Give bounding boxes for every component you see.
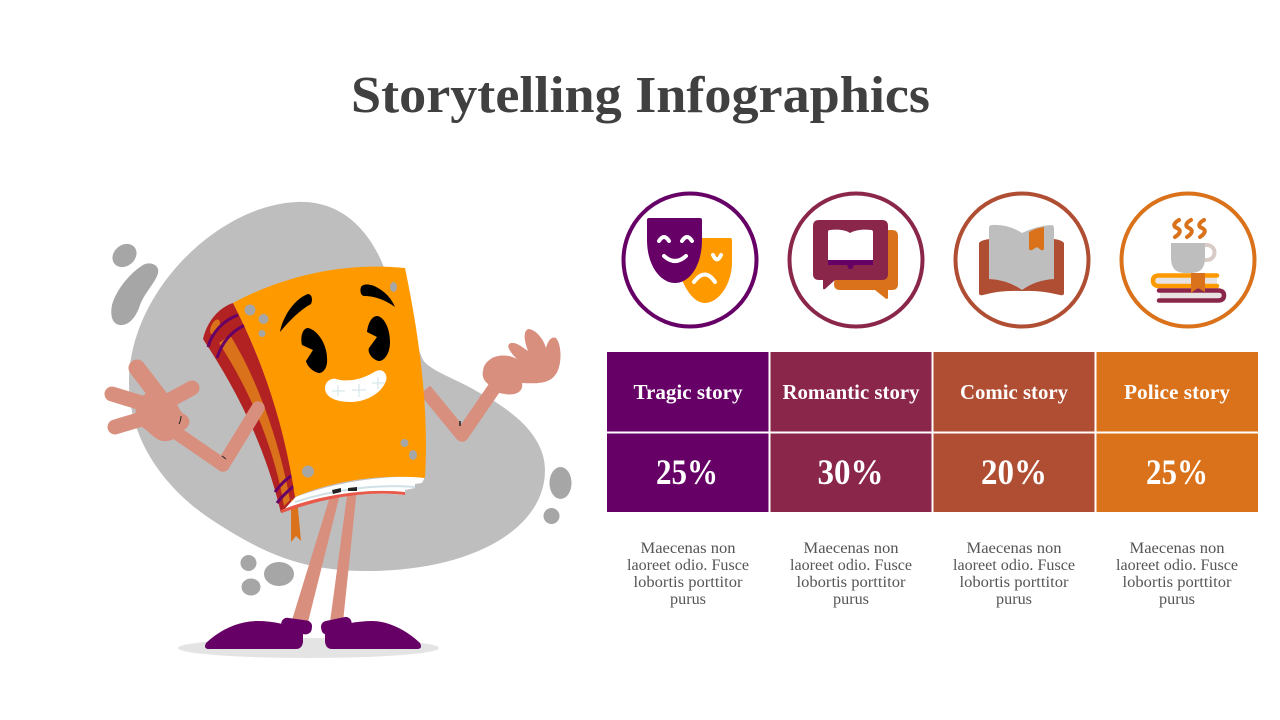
icon: coffee cup on books [1122, 194, 1254, 326]
column: Comic story [934, 352, 1094, 608]
column: Tragic story: Tragic story [634, 380, 743, 404]
column: Comic story: purus [996, 591, 1032, 608]
bookmark ribbon [291, 498, 301, 542]
left arm and hand [112, 368, 258, 465]
column: Police story: Police story [1124, 380, 1231, 404]
grey background blob [129, 202, 545, 571]
column: Tragic story [607, 352, 768, 608]
column: Romantic story: purus [833, 591, 869, 608]
book spine [203, 303, 297, 513]
column: Police story: lobortis porttitor [1122, 574, 1232, 591]
book cover [233, 267, 426, 497]
cover spots [244, 282, 417, 478]
column: Romantic story: 30% [818, 452, 884, 492]
column: Police story: purus [1159, 591, 1195, 608]
book pages [281, 477, 425, 513]
shoes [205, 616, 421, 649]
column: Tragic story: 25% [656, 452, 718, 492]
column: Romantic story: lobortis porttitor [796, 574, 906, 591]
column: Comic story: laoreet odio. Fusce [953, 557, 1075, 574]
illustration: book character [108, 202, 572, 658]
column: Tragic story: Maecenas non [640, 540, 736, 557]
column: Comic story: 20% [981, 452, 1047, 492]
face [280, 284, 395, 402]
column: Tragic story: laoreet odio. Fusce [627, 557, 749, 574]
ground shadow [178, 638, 439, 658]
column: Romantic story: Romantic story [782, 380, 920, 404]
column: Romantic story: Maecenas non [804, 540, 899, 557]
icon: speech bubbles with book [790, 194, 922, 326]
column: Comic story: Comic story [960, 380, 1068, 404]
column: Comic story: lobortis porttitor [960, 574, 1069, 591]
column: Police story [1096, 352, 1258, 608]
column: Police story: Maecenas non [1130, 540, 1225, 557]
column: Romantic story: laoreet odio. Fusce [790, 557, 912, 574]
column: Tragic story: lobortis porttitor [634, 574, 743, 591]
column: Tragic story: purus [670, 591, 706, 608]
column: Police story: laoreet odio. Fusce [1116, 557, 1238, 574]
icon: open book with bookmark [956, 194, 1088, 326]
column: Police story: 25% [1146, 452, 1208, 492]
column: Comic story: Maecenas non [966, 540, 1062, 557]
title: Storytelling Infographics [351, 67, 930, 124]
small grey spots [108, 239, 572, 596]
column: Romantic story [770, 352, 932, 608]
icon: theatre masks [624, 194, 756, 326]
legs [292, 488, 357, 622]
right arm and hand [425, 329, 560, 435]
